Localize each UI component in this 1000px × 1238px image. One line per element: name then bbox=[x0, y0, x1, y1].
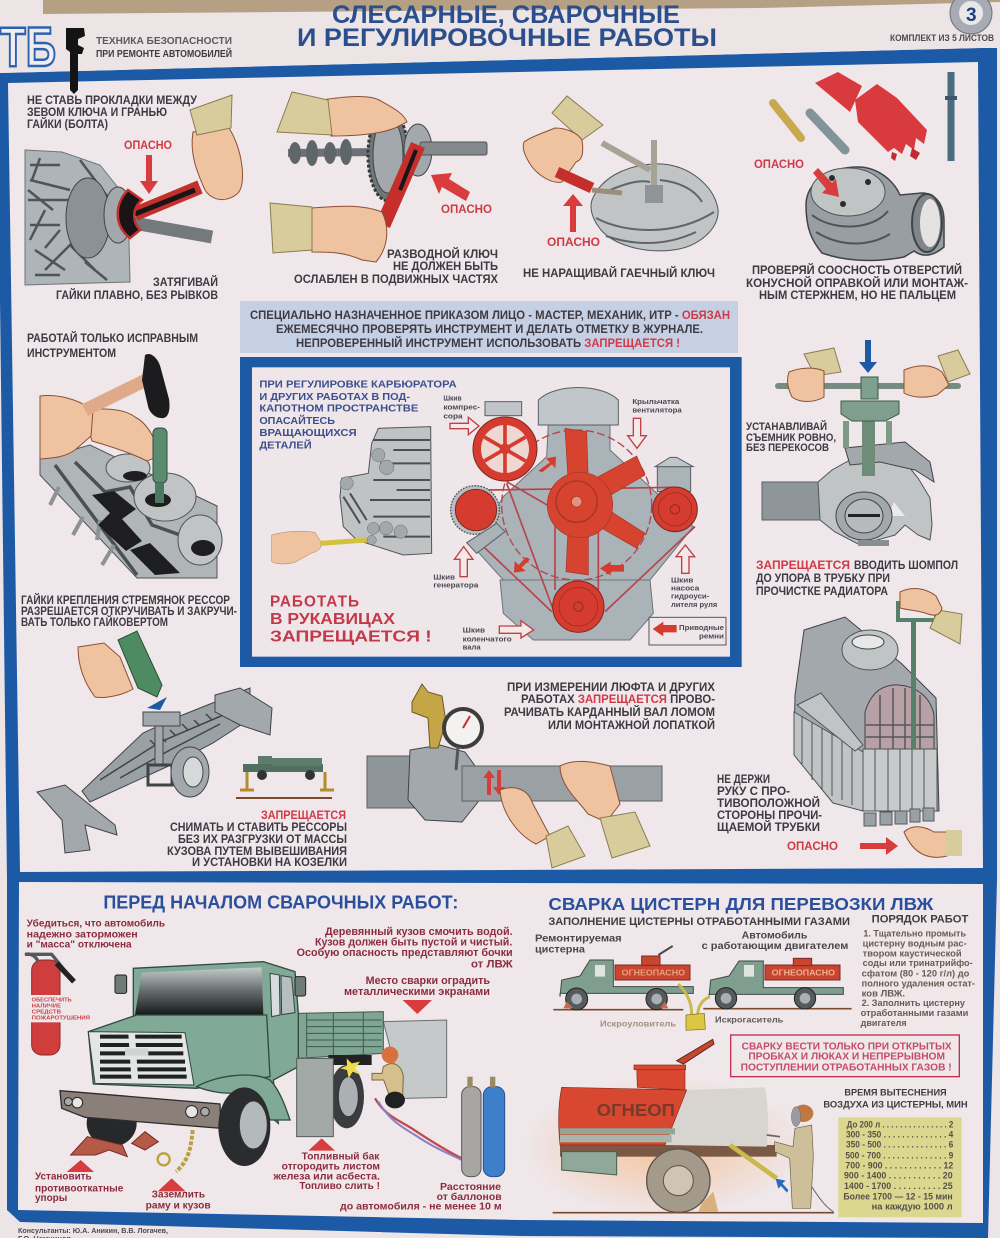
caption: ВАТЬ ТОЛЬКО ГАЙКОВЕРТОМ bbox=[21, 614, 168, 629]
caption bbox=[746, 262, 968, 302]
engine diagram bbox=[450, 387, 697, 640]
hammer bbox=[85, 354, 170, 418]
note: wooden body bbox=[297, 926, 513, 971]
hands bbox=[40, 396, 157, 461]
caption: ЗАТЯГИВАЙ bbox=[153, 274, 218, 289]
engine labels: Шкив bbox=[463, 628, 486, 635]
subheading: procedure: ПОРЯДОК РАБОТ bbox=[872, 913, 969, 925]
cylinder head bbox=[40, 445, 222, 578]
ejected dirt blocks bbox=[864, 808, 934, 826]
note: chocks bbox=[35, 1171, 124, 1204]
welder bbox=[767, 1105, 833, 1212]
tools bbox=[773, 72, 957, 161]
note: wooden body: от ЛВЖ bbox=[471, 959, 513, 971]
note: fuel tank: Топливный бак bbox=[302, 1150, 379, 1162]
top hand bbox=[277, 92, 407, 136]
arrow bbox=[859, 340, 877, 373]
pump pulley bbox=[653, 487, 697, 532]
heading: displacement time: ВОЗДУХА ИЗ ЦИСТЕРНЫ, МИН bbox=[823, 1099, 968, 1109]
caption: ГАЙКИ ПЛАВНО, БЕЗ РЫВКОВ bbox=[56, 287, 218, 302]
arrow bbox=[860, 837, 898, 855]
note: brakes and ground: и "масса" отключена bbox=[27, 940, 132, 951]
procedure text: цистерну водным рас- bbox=[863, 939, 967, 949]
tanker 1 bbox=[553, 946, 693, 1010]
caption: НЕ ДЕРЖИ bbox=[717, 772, 770, 786]
nozzle bbox=[147, 697, 167, 710]
exhaust hose bbox=[730, 1145, 777, 1178]
procedure text: полного удаления остат- bbox=[862, 978, 975, 988]
text: no shims bbox=[27, 93, 197, 131]
procedure text: 1. Тщательно промыть bbox=[863, 929, 966, 939]
caption: СЪЕМНИК РОВНО, bbox=[746, 432, 836, 444]
engine labels: Крыльчатка bbox=[632, 399, 679, 406]
fire extinguisher: ОБЕСПЕЧИТЬ bbox=[32, 998, 72, 1004]
caption: ОСЛАБЛЕН В ПОДВИЖНЫХ ЧАСТЯХ bbox=[294, 272, 498, 286]
engine labels: вала bbox=[463, 644, 481, 651]
note: cylinder distance: до автомобиля - не менее 10 м bbox=[340, 1200, 502, 1212]
hand with screwdriver bbox=[272, 531, 367, 564]
caption: ИЛИ МОНТАЖНОЙ ЛОПАТКОЙ bbox=[548, 717, 715, 732]
callout: responsible person: НЕПРОВЕРЕННЫЙ ИНСТРУМЕНТ ИСПОЛЬЗОВАТЬ ЗАПРЕЩАЕТСЯ ! bbox=[296, 335, 680, 350]
callout: open plugs: СВАРКУ ВЕСТИ ТОЛЬКО ПРИ ОТКРЫТЫХ bbox=[742, 1041, 952, 1052]
caption: ЗАПРЕЩАЕТСЯ bbox=[756, 558, 850, 572]
note: screens: Место сварки оградить bbox=[366, 975, 490, 987]
hand bbox=[78, 643, 133, 698]
fender bbox=[197, 1075, 290, 1120]
caption: РАЗВОДНОЙ КЛЮЧ bbox=[387, 246, 498, 261]
caption: НЕ ДОЛЖЕН БЫТЬ bbox=[393, 259, 498, 273]
logo caption: ТЕХНИКА БЕЗОПАСНОСТИ bbox=[96, 35, 232, 47]
table: displacement time: До 200 л . . . . . . . . . . . . . . . 2 bbox=[847, 1119, 953, 1129]
legend: drive belts: Приводные bbox=[679, 625, 724, 632]
panel: check alignment with mandrel bbox=[746, 72, 968, 302]
danger label: ОПАСНО bbox=[124, 138, 172, 152]
belt direction arrows bbox=[514, 457, 624, 576]
panel: tank welding bbox=[523, 894, 975, 1217]
engine labels: лителя руля bbox=[671, 602, 717, 609]
blue arrow bbox=[776, 1179, 788, 1193]
callout: responsible person: СПЕЦИАЛЬНО НАЗНАЧЕННОЕ ПРИКАЗОМ ЛИЦО - МАСТЕР, МЕХАНИК, ИТР - ОБЯЗАН bbox=[250, 308, 730, 322]
impact wrench bbox=[118, 631, 162, 697]
procedure text: соды или тринатрийфо- bbox=[863, 958, 973, 968]
fire extinguisher: СРЕДСТВ bbox=[32, 1009, 61, 1015]
note: screens bbox=[344, 975, 490, 998]
hand with red wrench bbox=[523, 96, 603, 188]
note: fuel tank: железа или асбеста. bbox=[272, 1170, 380, 1182]
fuel tank shield bbox=[297, 1058, 333, 1137]
caption: ПРОВЕРЯЙ СООСНОСТЬ ОТВЕРСТИЙ bbox=[752, 262, 962, 277]
engine labels: гидроуси- bbox=[671, 594, 710, 601]
pipe and joint bbox=[762, 460, 932, 546]
clamp right bbox=[215, 688, 272, 735]
caption: УСТАНАВЛИВАЙ bbox=[746, 420, 827, 433]
upper hand bbox=[900, 589, 962, 644]
prohibition bbox=[270, 594, 432, 646]
crankshaft pulley bbox=[553, 581, 604, 632]
callout: open plugs: ПРОБКАХ И ЛЮКАХ И НЕПРЕРЫВНОМ bbox=[748, 1051, 945, 1062]
note: fuel tank: Топливо слить ! bbox=[299, 1181, 380, 1192]
caption: И УСТАНОВКИ НА КОЗЕЛКИ bbox=[192, 855, 347, 869]
radiator body bbox=[794, 617, 939, 811]
heading: displacement time: ВРЕМЯ ВЫТЕСНЕНИЯ bbox=[844, 1088, 947, 1098]
shaft bbox=[367, 745, 662, 822]
note: grounding: раму и кузов bbox=[146, 1200, 211, 1211]
caption: ТИВОПОЛОЖНОЙ bbox=[717, 795, 820, 810]
caption: СНИМАТЬ И СТАВИТЬ РЕССОРЫ bbox=[170, 820, 347, 834]
pointer bbox=[158, 1178, 186, 1191]
hood bbox=[88, 1015, 270, 1088]
note: cylinder distance bbox=[340, 1182, 502, 1212]
caption bbox=[746, 420, 836, 454]
dial gauge bbox=[412, 684, 482, 770]
panel: spring with impact wrench bbox=[21, 592, 347, 869]
pointer bbox=[403, 1000, 432, 1014]
note: brakes and ground: Убедиться, что автомобиль bbox=[27, 918, 165, 930]
label: running vehicle: с работающим двигателем bbox=[702, 940, 848, 952]
label: repaired tank: цистерна bbox=[535, 944, 585, 955]
hand bbox=[190, 95, 243, 200]
rear wheel bbox=[329, 1065, 364, 1128]
note: fuel tank bbox=[272, 1150, 380, 1192]
note: grounding bbox=[146, 1190, 211, 1211]
caption: ИНСТРУМЕНТОМ bbox=[27, 346, 116, 360]
note: chocks: Установить bbox=[35, 1171, 92, 1182]
caption: КУЗОВА ПУТЕМ ВЫВЕШИВАНИЯ bbox=[167, 844, 347, 858]
tanker 2 bbox=[703, 958, 852, 1009]
caption: БЕЗ ИХ РАЗГРУЗКИ ОТ МАССЫ bbox=[178, 832, 347, 846]
compressor pulley bbox=[473, 417, 537, 481]
title bbox=[297, 1, 717, 52]
caption: ЩАЕМОЙ ТРУБКИ bbox=[717, 819, 820, 834]
danger label: ОПАСНО bbox=[754, 157, 804, 171]
procedure text: сфатом (80 - 120 г/л) до bbox=[862, 968, 970, 978]
table: displacement time: 500 - 700 . . . . . . . . . . . . . . 9 bbox=[845, 1150, 953, 1160]
engine labels: насоса bbox=[671, 586, 699, 593]
sheet number badge bbox=[950, 0, 992, 34]
procedure text bbox=[861, 929, 975, 1028]
note: wooden body: Особую опасность представляют бочки bbox=[297, 947, 513, 959]
label: repaired tank: Ремонтируемая bbox=[535, 934, 622, 945]
fire extinguisher bbox=[25, 954, 93, 1055]
table: displacement time: 350 - 500 . . . . . . . . . . . . . . 6 bbox=[846, 1140, 953, 1150]
camshaft bbox=[288, 109, 487, 201]
arrow bbox=[563, 194, 583, 232]
procedure text: двигателя bbox=[861, 1018, 907, 1028]
title: СЛЕСАРНЫЕ, СВАРОЧНЫЕ bbox=[332, 1, 680, 29]
note: brakes and ground: надежно заторможен bbox=[27, 929, 138, 940]
warning text: КАПОТНОМ ПРОСТРАНСТВЕ bbox=[259, 404, 418, 415]
danger label: ОПАСНО bbox=[787, 839, 838, 853]
note: screens: металлическими экранами bbox=[344, 986, 490, 998]
spark arrestor and hoses bbox=[678, 984, 710, 1030]
wheel hidden bbox=[87, 1100, 137, 1147]
label: repaired tank bbox=[535, 934, 622, 955]
sheet number badge: 3 bbox=[966, 5, 977, 26]
table: displacement time bbox=[838, 1117, 962, 1217]
prohibition: РАБОТАТЬ bbox=[270, 594, 360, 611]
heading: ПЕРЕД НАЧАЛОМ СВАРОЧНЫХ РАБОТ: bbox=[103, 891, 458, 912]
note: cylinder distance: от баллонов bbox=[437, 1191, 502, 1203]
engine labels: генератора bbox=[433, 582, 478, 589]
heading: СВАРКА ЦИСТЕРН ДЛЯ ПЕРЕВОЗКИ ЛВЖ bbox=[548, 894, 934, 914]
text: no shims: ЗЕВОМ КЛЮЧА И ГРАНЬЮ bbox=[27, 105, 167, 119]
large tank: ОГНЕОП bbox=[597, 1100, 675, 1120]
subheading: exhaust fill: ЗАПОЛНЕНИЕ ЦИСТЕРНЫ ОТРАБОТАННЫМИ ГАЗАМИ bbox=[548, 916, 850, 928]
table: displacement time: 700 - 900 . . . . . . . . . . . . 12 bbox=[845, 1160, 953, 1170]
callout: responsible person bbox=[240, 301, 738, 353]
caption bbox=[167, 808, 347, 869]
caption: РАЧИВАТЬ КАРДАННЫЙ ВАЛ ЛОМОМ bbox=[504, 704, 715, 719]
legend: drive belts: ремни bbox=[699, 633, 724, 640]
engine labels: Шкив bbox=[433, 574, 456, 581]
caption bbox=[294, 246, 498, 286]
fire extinguisher: ПОЖАРОТУШЕНИЯ bbox=[32, 1015, 90, 1021]
engine labels: Шкив bbox=[671, 577, 694, 584]
caption: РАЗРЕШАЕТСЯ ОТКРУЧИВАТЬ И ЗАКРУЧИ- bbox=[21, 604, 237, 618]
logo caption bbox=[96, 35, 232, 60]
panel: measuring cardan shaft bbox=[367, 680, 715, 868]
caption: ПРОЧИСТКЕ РАДИАТОРА bbox=[756, 584, 888, 598]
rod bbox=[898, 603, 936, 749]
panel: wrench on engine block bbox=[25, 93, 243, 302]
panel: before welding bbox=[25, 891, 513, 1212]
caption bbox=[21, 592, 237, 629]
engine labels: компрес- bbox=[443, 404, 481, 411]
tanker 2: ОГНЕОПАСНО bbox=[772, 968, 835, 977]
callout: open plugs: ПОСТУПЛЕНИИ ОТРАБОТАННЫХ ГАЗОВ ! bbox=[741, 1063, 952, 1074]
note: chocks: упоры bbox=[35, 1193, 67, 1204]
caption: БЕЗ ПЕРЕКОСОВ bbox=[746, 442, 829, 454]
text: no shims: НЕ СТАВЬ ПРОКЛАДКИ МЕЖДУ bbox=[27, 93, 197, 107]
prohibition: ЗАПРЕЩАЕТСЯ ! bbox=[270, 629, 432, 646]
caption: КОНУСНОЙ ОПРАВКОЙ ИЛИ МОНТАЖ- bbox=[746, 275, 968, 290]
caption bbox=[504, 680, 715, 732]
T-bar bbox=[778, 377, 958, 399]
clutch assembly bbox=[591, 140, 718, 251]
legend: drive belts bbox=[649, 617, 726, 645]
pointer bbox=[67, 1160, 94, 1172]
wheel chocks bbox=[71, 1132, 158, 1157]
generator pulley bbox=[451, 486, 505, 553]
panel: working tool hammer bbox=[27, 330, 222, 578]
hands bbox=[500, 761, 650, 868]
logo: TB with wrench bbox=[0, 15, 85, 94]
caption: ЗАПРЕЩАЕТСЯ bbox=[261, 808, 346, 822]
arrow bbox=[140, 155, 158, 194]
table: displacement time: 1400 - 1700 . . . . . . . . . . 25 bbox=[844, 1181, 953, 1191]
grille bbox=[88, 1032, 194, 1085]
welding glow bbox=[523, 1077, 803, 1217]
caption bbox=[27, 330, 198, 360]
text: no shims: ГАЙКИ (БОЛТА) bbox=[27, 116, 108, 131]
ground line bbox=[553, 1210, 834, 1215]
table: displacement time: Более 1700 — 12 - 15 мин bbox=[843, 1191, 953, 1201]
arrow bbox=[431, 173, 470, 201]
panel: puller bbox=[746, 340, 970, 546]
welder bbox=[340, 1047, 405, 1108]
note: wooden body: Кузов должен быть пустой и чистый. bbox=[315, 937, 512, 949]
callout: open plugs bbox=[731, 1035, 959, 1077]
fire extinguisher: НАЛИЧИЕ bbox=[32, 1004, 61, 1010]
procedure text: 2. Заполнить цистерну bbox=[862, 998, 966, 1008]
caption: СТОРОНЫ ПРОЧИ- bbox=[717, 808, 822, 822]
table: displacement time: 300 - 350 . . . . . . . . . . . . . . 4 bbox=[846, 1129, 954, 1139]
note: brakes and ground bbox=[27, 918, 165, 951]
prohibition: В РУКАВИЦАХ bbox=[270, 611, 396, 628]
small truck on stands bbox=[236, 756, 334, 798]
outlined pointer arrows bbox=[450, 417, 695, 638]
warning text: ОПАСАЙТЕСЬ bbox=[259, 414, 336, 427]
label: running vehicle bbox=[702, 929, 848, 952]
bottom hand bbox=[270, 203, 387, 262]
cargo body bbox=[297, 1012, 383, 1065]
engine labels: вентилятора bbox=[632, 407, 682, 414]
note: chocks: противооткатные bbox=[35, 1184, 124, 1195]
double arrows bbox=[483, 770, 505, 795]
warning text: ВРАЩАЮЩИХСЯ bbox=[259, 428, 357, 439]
hands bbox=[788, 348, 970, 402]
logo caption: ПРИ РЕМОНТЕ АВТОМОБИЛЕЙ bbox=[96, 47, 232, 60]
engine block bbox=[25, 150, 212, 285]
danger label: ОПАСНО bbox=[547, 235, 600, 249]
warning text bbox=[259, 380, 457, 451]
engine labels: Шкив bbox=[443, 396, 462, 403]
caption: ВВОДИТЬ ШОМПОЛ bbox=[854, 558, 958, 572]
caption: РУКУ С ПРО- bbox=[717, 784, 790, 798]
truck bbox=[60, 962, 383, 1166]
label: spark arrestor: Искроуловитель bbox=[600, 1019, 676, 1029]
label: running vehicle: Автомобиль bbox=[742, 929, 807, 941]
heading: displacement time bbox=[823, 1088, 968, 1109]
table: displacement time: 900 - 1400 . . . . . . . . . . . 20 bbox=[844, 1171, 953, 1181]
ground chain bbox=[158, 1130, 193, 1172]
pointer bbox=[308, 1138, 335, 1151]
protective screen bbox=[383, 1020, 447, 1098]
caption: ГАЙКИ КРЕПЛЕНИЯ СТРЕМЯНОК РЕССОР bbox=[21, 592, 230, 607]
panel: engine rotating parts bbox=[240, 357, 742, 667]
note: grounding: Заземлить bbox=[152, 1190, 205, 1201]
note: fuel tank: отгородить листом bbox=[282, 1161, 380, 1172]
warning text: ДЕТАЛЕЙ bbox=[259, 438, 312, 451]
hoses bbox=[375, 1098, 462, 1158]
header strip bbox=[0, 0, 1000, 73]
caption bbox=[756, 558, 958, 598]
caption: РАБОТАХ ЗАПРЕЩАЕТСЯ ПРОВО- bbox=[521, 692, 715, 706]
carburetor bbox=[340, 427, 432, 555]
fan bbox=[547, 428, 645, 575]
panel: radiator rod bbox=[717, 558, 962, 857]
panel: do not extend wrench bbox=[523, 96, 718, 280]
puller frame bbox=[841, 401, 934, 482]
warning text: ПРИ РЕГУЛИРОВКЕ КАРБЮРАТОРА bbox=[259, 380, 457, 391]
title: И РЕГУЛИРОВОЧНЫЕ РАБОТЫ bbox=[297, 24, 717, 52]
engine labels: коленчатого bbox=[463, 636, 512, 643]
bumper bbox=[60, 1091, 221, 1128]
caption: ДО УПОРА В ТРУБКУ ПРИ bbox=[756, 571, 890, 585]
cab bbox=[115, 962, 306, 1123]
panel: adjustable wrench on gear bbox=[270, 92, 498, 286]
warning text: И ДРУГИХ РАБОТАХ В ПОД- bbox=[259, 392, 411, 403]
gas cylinders bbox=[462, 1077, 505, 1177]
danger label: ОПАСНО bbox=[441, 202, 492, 216]
wrench bbox=[118, 187, 200, 238]
tanker 1: ОГНЕОПАСНО bbox=[622, 968, 685, 977]
label: spark extinguisher: Искрогаситель bbox=[715, 1014, 783, 1024]
table: displacement time: на каждую 1000 л bbox=[872, 1202, 953, 1212]
large tank bbox=[559, 1039, 777, 1175]
arrow bbox=[813, 168, 839, 197]
front wheel bbox=[218, 1087, 270, 1166]
caption: РАБОТАЙ ТОЛЬКО ИСПРАВНЫМ bbox=[27, 330, 198, 345]
engine labels bbox=[433, 396, 717, 651]
procedure text: ков ЛВЖ. bbox=[862, 988, 905, 998]
red warning hand bbox=[815, 72, 927, 161]
lower hand bbox=[904, 827, 962, 857]
caption bbox=[717, 772, 822, 834]
leaf spring bbox=[82, 688, 250, 802]
wrench bbox=[383, 145, 418, 225]
procedure text: твором каустической bbox=[863, 949, 962, 959]
housing bbox=[806, 167, 944, 260]
note: wooden body: Деревянный кузов смочить водой. bbox=[325, 926, 513, 938]
callout: responsible person: ЕЖЕМЕСЯЧНО ПРОВЕРЯТЬ ИНСТРУМЕНТ И ДЕЛАТЬ ОТМЕТКУ В ЖУРНАЛЕ. bbox=[276, 322, 703, 336]
caption bbox=[56, 274, 218, 302]
logo: TB with wrench: ТБ bbox=[0, 15, 56, 78]
clamp bottom bbox=[37, 785, 117, 853]
note: cylinder distance: Расстояние bbox=[440, 1182, 501, 1193]
footer credits: Консультанты: Ю.А. Аникин, В.В. Логачев, bbox=[18, 1226, 168, 1235]
engine labels: сора bbox=[443, 413, 463, 420]
large wheel bbox=[647, 1149, 718, 1212]
caption: ПРИ ИЗМЕРЕНИИ ЛЮФТА И ДРУГИХ bbox=[507, 680, 715, 694]
procedure text: отработанными газами bbox=[861, 1008, 969, 1018]
caption: НЕ НАРАЩИВАЙ ГАЕЧНЫЙ КЛЮЧ bbox=[523, 265, 715, 280]
caption: НЫМ СТЕРЖНЕМ, НО НЕ ПАЛЬЦЕМ bbox=[759, 288, 956, 302]
punch bbox=[153, 428, 167, 503]
